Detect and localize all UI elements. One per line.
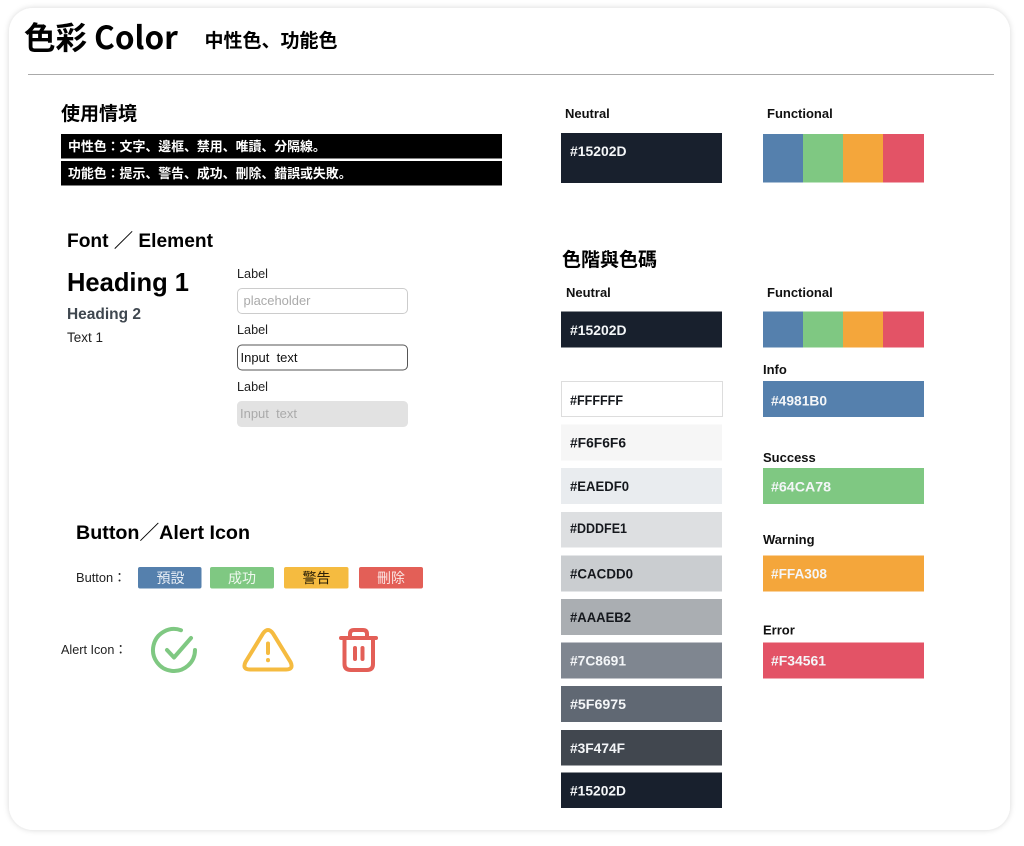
swatch: CACDD0 xyxy=(561,556,722,592)
swatch: info: Info xyxy=(763,362,787,377)
icon: check circle xyxy=(153,629,195,671)
panel: usage xyxy=(61,99,502,186)
swatch: DDDFE1 xyxy=(561,512,722,548)
panel: button and alert icon xyxy=(61,522,423,671)
input disabled: Label xyxy=(237,380,268,394)
swatch: neutral main: #15202D xyxy=(570,143,626,159)
label: neutral scale: Neutral xyxy=(566,285,611,300)
heading: scale and codes: 色階與色碼 xyxy=(562,245,657,272)
swatch: warning: #FFA308 xyxy=(771,566,827,582)
swatch: 3F474F xyxy=(561,730,722,766)
swatch: success: #64CA78 xyxy=(771,478,831,494)
button: default xyxy=(138,567,202,588)
swatch: 3F474F: #3F474F xyxy=(570,740,625,756)
swatch: EAEDF0 xyxy=(561,468,722,504)
swatch: 7C8691: #7C8691 xyxy=(570,652,626,668)
swatch: AAAEB2 xyxy=(561,599,722,635)
panel: functional scale xyxy=(763,285,924,678)
swatch: error: Error xyxy=(763,622,795,638)
heading: usage: 使用情境 xyxy=(61,99,137,126)
button: success: 成功 xyxy=(228,568,256,588)
swatch: F6F6F6 xyxy=(561,424,722,460)
subtitle: 中性色、功能色 xyxy=(204,26,338,53)
input placeholder xyxy=(237,267,408,314)
swatch strip: functional scale xyxy=(763,312,924,348)
input disabled xyxy=(237,380,408,427)
input active: Label xyxy=(237,323,268,337)
swatch: success: Success xyxy=(763,450,816,465)
swatch: error xyxy=(763,622,924,678)
label: functional scale: Functional xyxy=(767,285,833,300)
swatch: warning xyxy=(763,532,924,592)
button: delete xyxy=(359,567,423,588)
alert icon label: Alert Icon： xyxy=(61,642,127,657)
button label: Button： xyxy=(76,570,126,585)
swatch: info xyxy=(763,362,924,417)
swatch: F6F6F6: #F6F6F6 xyxy=(570,434,626,450)
heading: font element: Font ／ Element xyxy=(67,230,214,252)
label: neutral: Neutral xyxy=(565,106,610,121)
swatch: 15202D: #15202D xyxy=(570,782,626,798)
bar: functional usage xyxy=(61,161,502,186)
swatch: CACDD0: #CACDD0 xyxy=(570,566,633,582)
swatch: neutral main xyxy=(561,133,722,183)
panel: functional summary xyxy=(763,106,924,182)
button: delete: 刪除 xyxy=(377,568,405,588)
swatch: 15202D xyxy=(561,772,722,808)
panel: font and element xyxy=(67,230,408,427)
button: warning: 警告 xyxy=(302,568,330,588)
icon: trash xyxy=(341,630,376,670)
button: warning xyxy=(284,567,348,588)
icon: warning triangle xyxy=(244,630,292,670)
swatch: 15202D header: #15202D xyxy=(570,322,626,338)
heading 1 sample: Heading 1 xyxy=(67,267,189,297)
swatch: 5F6975 xyxy=(561,686,722,722)
swatch: 15202D header xyxy=(561,312,722,348)
swatch: AAAEB2: #AAAEB2 xyxy=(570,609,631,625)
swatch: DDDFE1: #DDDFE1 xyxy=(570,520,627,536)
input active xyxy=(237,323,408,370)
swatch: info: #4981B0 xyxy=(771,392,827,408)
input disabled: Input text xyxy=(240,406,297,421)
panel: neutral summary xyxy=(561,106,722,183)
button: default: 預設 xyxy=(156,568,184,588)
input placeholder: placeholder xyxy=(244,293,311,308)
input placeholder: Label xyxy=(237,267,268,281)
swatch: success xyxy=(763,450,924,504)
input active: Input text xyxy=(240,350,298,365)
bar: neutral usage xyxy=(61,134,502,158)
swatch: 5F6975: #5F6975 xyxy=(570,696,626,712)
swatch strip: functional xyxy=(763,134,924,182)
panel: neutral scale xyxy=(561,285,722,808)
button: success xyxy=(210,567,274,588)
text 1 sample: Text 1 xyxy=(67,330,103,345)
title: 色彩 Color xyxy=(24,13,178,59)
swatch: FFFFFF xyxy=(562,382,722,416)
label: functional: Functional xyxy=(767,106,833,121)
bar: neutral usage: 中性色：文字、邊框、禁用、唯讀、分隔線。 xyxy=(68,136,326,155)
swatch: warning: Warning xyxy=(763,532,815,547)
swatch: FFFFFF: #FFFFFF xyxy=(570,392,623,408)
swatch: error: #F34561 xyxy=(771,652,826,668)
swatch: 7C8691 xyxy=(561,642,722,678)
bar: functional usage: 功能色：提示、警告、成功、刪除、錯誤或失敗。 xyxy=(68,163,352,182)
heading: button alert icon: Button／Alert Icon xyxy=(76,522,250,544)
swatch: EAEDF0: #EAEDF0 xyxy=(570,478,629,494)
heading 2 sample: Heading 2 xyxy=(67,306,141,323)
